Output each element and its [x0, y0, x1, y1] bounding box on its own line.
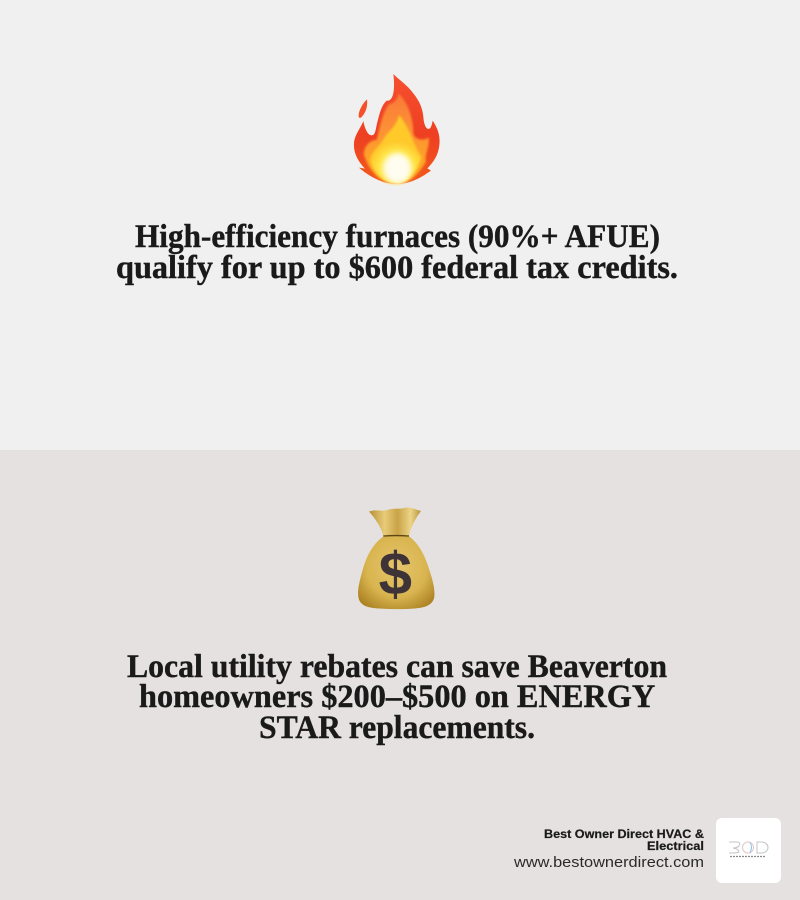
icon: fire: [354, 74, 440, 184]
footer: company name and website: www.bestownerdirect.com: [513, 854, 704, 871]
icon: money bag: [358, 508, 434, 609]
footer: company name and website: Best Owner Direct HVAC &: [544, 829, 704, 841]
footer: company name and website: Electrical: [647, 841, 704, 853]
icon: money bag: $: [379, 540, 412, 607]
heading: utility rebates: Local utility rebates can save Beaverton: [127, 649, 667, 685]
heading: utility rebates: STAR replacements.: [259, 710, 535, 746]
footer: company name and website: [513, 829, 704, 871]
logo mark: [729, 842, 768, 856]
heading: federal tax credit: qualify for up to $600 federal tax credits.: [116, 250, 678, 286]
panel: utility rebates: [0, 450, 800, 900]
heading: utility rebates: homeowners $200–$500 on ENERGY: [139, 679, 655, 715]
logo card: [716, 818, 781, 883]
heading: federal tax credit: High-efficiency furnaces (90%+ AFUE): [135, 219, 660, 255]
panel: federal tax credit: [0, 0, 800, 450]
